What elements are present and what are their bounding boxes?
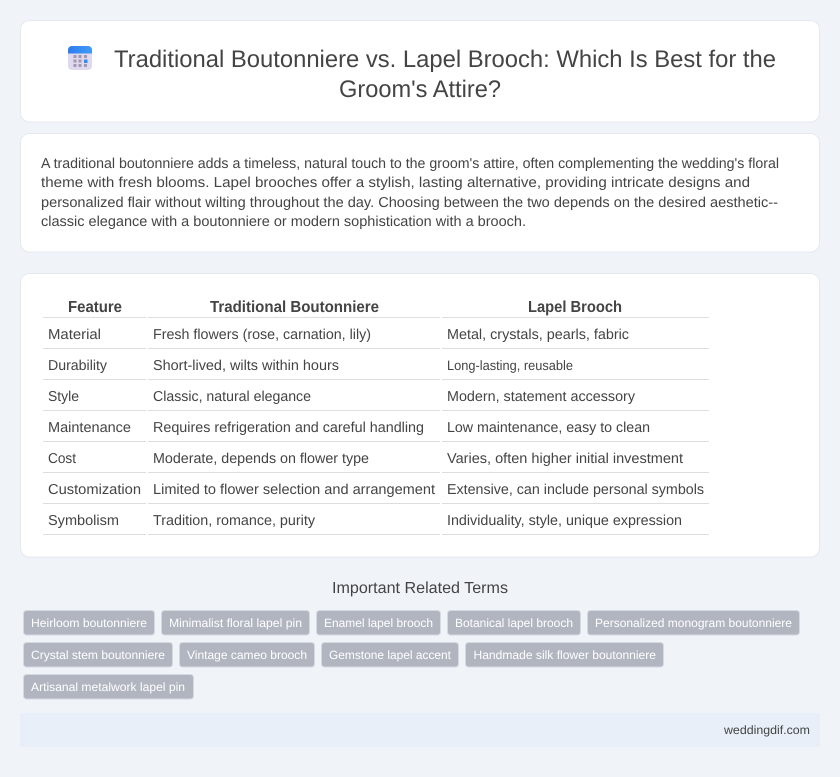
tag	[466, 642, 664, 667]
tag	[162, 610, 310, 635]
title: Traditional Boutonniere vs. Lapel Brooch: Which Is Best for the	[114, 46, 776, 73]
row: durability: Short-lived, wilts within hours	[153, 358, 339, 374]
row: durability: Durability	[48, 358, 108, 374]
tag: Artisanal metalwork lapel pin	[31, 680, 185, 694]
panel: comparison table	[20, 274, 820, 557]
tag	[24, 674, 194, 699]
row: symbolism: Symbolism	[48, 513, 119, 529]
row: style: Style	[48, 389, 79, 405]
tag	[24, 642, 172, 667]
panel: summary text: A traditional boutonniere adds a timeless, natural touch to the groom's attire, often complementing the wedding's floral	[41, 156, 779, 172]
row: maintenance	[43, 420, 709, 442]
tag: Heirloom boutonniere	[31, 616, 147, 630]
panel: summary text: personalized flair without wilting throughout the day. Choosing between the two depends on the desired aesthetic--	[41, 195, 778, 211]
row: symbolism: Tradition, romance, purity	[153, 513, 316, 529]
row: cost: Varies, often higher initial investment	[447, 451, 683, 467]
row: customization: Limited to flower selection and arrangement	[153, 482, 435, 498]
tag: Minimalist floral lapel pin	[169, 616, 302, 630]
title	[114, 46, 776, 103]
row: cost	[43, 451, 709, 473]
tag: Handmade silk flower boutonniere	[474, 648, 656, 662]
tag	[316, 610, 440, 635]
row: style: Modern, statement accessory	[447, 389, 636, 405]
row: symbolism	[43, 513, 709, 535]
tag: Botanical lapel brooch	[455, 616, 573, 630]
tag	[24, 610, 154, 635]
row: maintenance: Maintenance	[48, 420, 131, 436]
table header	[43, 299, 709, 318]
heading: important related terms: Important Related Terms	[332, 580, 508, 597]
panel: summary text: classic elegance with a boutonniere or modern sophistication with a brooch.	[41, 214, 526, 230]
row: material: Metal, crystals, pearls, fabric	[447, 327, 629, 343]
icon: calendar	[68, 46, 92, 70]
tag: Vintage cameo brooch	[187, 648, 307, 662]
row: material: Fresh flowers (rose, carnation, lily)	[153, 327, 371, 343]
table header: Traditional Boutonniere	[210, 299, 379, 316]
row: customization	[43, 482, 709, 504]
row: durability: Long-lasting, reusable	[447, 358, 573, 373]
header panel	[20, 20, 820, 122]
row: style: Classic, natural elegance	[153, 389, 311, 405]
panel: summary text: theme with fresh blooms. Lapel brooches offer a stylish, lasting alternative, providing intricate designs and	[41, 175, 750, 191]
row: durability	[43, 358, 709, 380]
title: Groom's Attire?	[339, 76, 501, 103]
row: maintenance: Requires refrigeration and careful handling	[153, 420, 424, 436]
row: symbolism: Individuality, style, unique expression	[447, 513, 682, 529]
table header: Lapel Brooch	[528, 299, 622, 316]
related term tags	[24, 610, 800, 699]
row: maintenance: Low maintenance, easy to clean	[447, 420, 650, 436]
row: style	[43, 389, 709, 411]
row: customization: Extensive, can include personal symbols	[447, 482, 704, 498]
tag: Enamel lapel brooch	[324, 616, 433, 630]
row: customization: Customization	[48, 482, 141, 498]
tag: Crystal stem boutonniere	[31, 648, 165, 662]
tag	[322, 642, 458, 667]
footer	[20, 713, 820, 747]
tag: Personalized monogram boutonniere	[595, 616, 792, 630]
tag	[180, 642, 314, 667]
row: cost: Cost	[48, 451, 76, 467]
tag: Gemstone lapel accent	[329, 648, 452, 662]
footer: weddingdif.com	[723, 723, 810, 737]
tag	[448, 610, 580, 635]
panel: summary text	[20, 134, 820, 252]
tag	[588, 610, 800, 635]
row: material	[43, 327, 709, 349]
row: cost: Moderate, depends on flower type	[153, 451, 369, 467]
table header: Feature	[68, 299, 122, 316]
row: material: Material	[48, 327, 101, 343]
